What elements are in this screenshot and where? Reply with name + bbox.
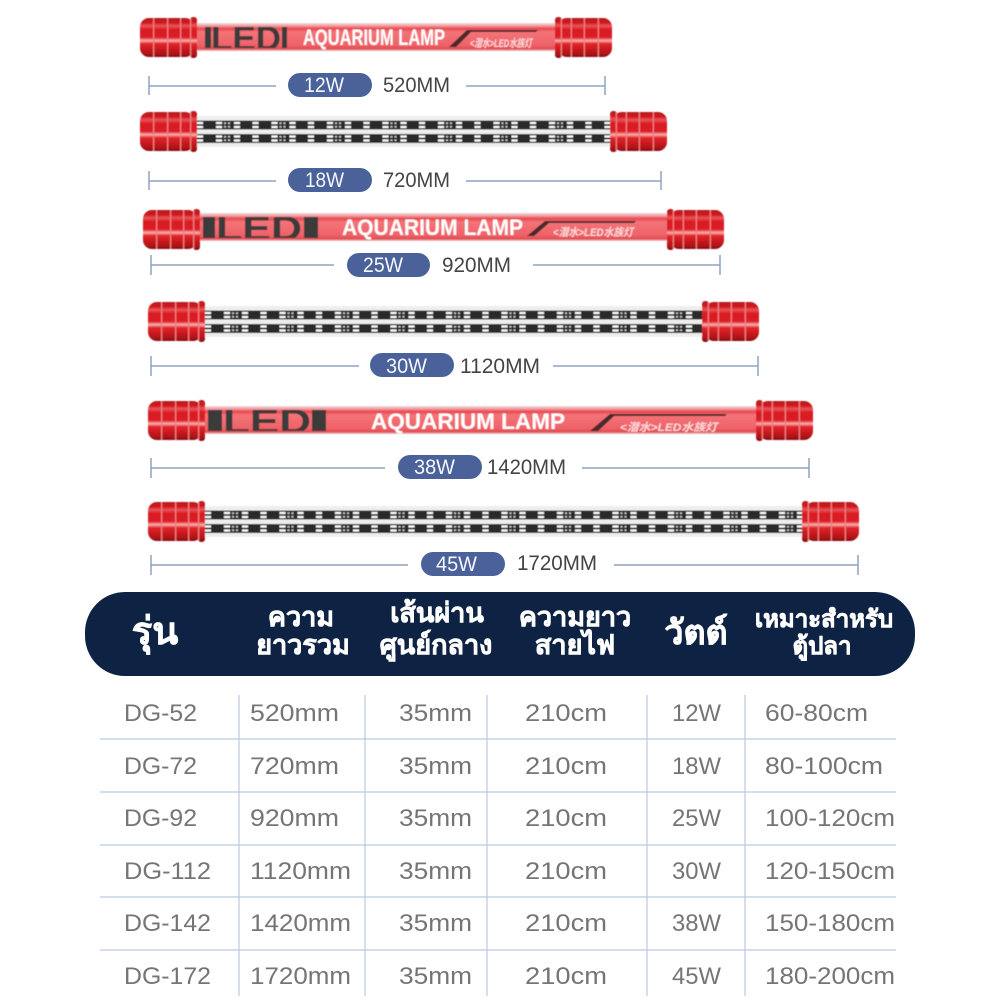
row DG-52: 210cm [525,700,607,727]
row DG-172: 35mm [399,963,472,990]
row DG-172: 210cm [525,963,607,990]
header: model: รุ่น [132,611,178,655]
slash mark [527,221,636,236]
header: center diameter: ศูนย์กลาง [380,629,492,662]
row DG-92 [124,805,895,832]
LED lettering: LED [216,210,302,248]
row DG-142: DG-142 [124,910,211,937]
row DG-72 [124,753,883,780]
row DG-112: 210cm [525,858,607,885]
dimension: 25W 920MM: 25W [363,254,403,277]
row DG-172: DG-172 [124,963,211,990]
row DG-52: DG-52 [124,700,197,727]
row DG-172: 45W [672,963,721,990]
row DG-92: 100-120cm [765,805,895,832]
row DG-72: 80-100cm [765,753,883,780]
LED lettering [202,216,319,239]
LED lettering: LED [223,403,311,441]
small lamp text: <潜水>LED水族灯 [553,226,635,239]
header: total length: ยาวรวม [256,630,350,660]
header: suitable tank: ตู้ปลา [792,633,852,661]
row DG-92: DG-92 [124,805,197,832]
dimension: 30W 1120MM: 30W [386,355,427,378]
dimension: 38W 1420MM [151,455,809,479]
slash mark [449,30,538,47]
lamp label: AQUARIUM LAMP [342,215,523,240]
row DG-142: 35mm [399,910,472,937]
row DG-72: 720mm [250,753,339,780]
row DG-92: 25W [672,805,721,832]
table header bar [85,592,915,676]
dimension: 18W 720MM [149,168,661,192]
row DG-92: 210cm [525,805,607,832]
row DG-112: 35mm [399,858,472,885]
lamp: 38W red tube [148,400,813,441]
dimension: 45W 1720MM: 1720MM [517,552,597,575]
row DG-112: 120-150cm [765,858,895,885]
row DG-72: 35mm [399,753,472,780]
LED lettering [207,410,327,432]
dimension: 18W 720MM: 18W [305,169,344,192]
header: watt: วัตต์ [664,613,728,652]
header: suitable tank: เหมาะสำหรับ [755,606,893,633]
row DG-142 [124,910,895,937]
row DG-142: 150-180cm [765,910,895,937]
row DG-112 [124,858,895,885]
LED lettering: LED [211,20,281,58]
header: center diameter: เส้นผ่าน [390,598,484,628]
row DG-92: 35mm [399,805,472,832]
row DG-112: DG-112 [124,858,211,885]
slash mark [590,414,727,431]
dimension: 38W 1420MM: 38W [414,456,455,479]
row DG-172 [124,963,895,990]
row DG-72: DG-72 [124,753,197,780]
header: cable length: ความยาว [519,602,631,632]
lamp: 30W LED strip [148,301,759,342]
small lamp text: <潜水>LED水族灯 [470,37,533,50]
row DG-52: 12W [672,700,721,727]
header: cable length: สายไฟ [535,629,615,660]
dimension: 38W 1420MM: 1420MM [487,456,566,479]
row DG-172: 1720mm [250,963,351,990]
row DG-52: 520mm [250,700,339,727]
row DG-142: 38W [672,910,721,937]
LED lettering [204,26,288,49]
lamp: 18W LED strip [140,111,667,152]
header: total length: ความ [268,602,334,632]
dimension: 30W 1120MM [151,353,758,378]
lamp label: AQUARIUM LAMP [371,409,565,434]
lamp label: AQUARIUM LAMP [303,25,445,50]
dimension: 30W 1120MM: 1120MM [460,355,540,378]
dimension: 45W 1720MM [151,552,858,576]
dimension: 12W 520MM: 520MM [383,74,450,97]
dimension: 45W 1720MM: 45W [436,553,477,576]
row DG-72: 210cm [525,753,607,780]
lamp: 45W LED strip [148,501,859,542]
small lamp text: <潜水>LED水族灯 [620,421,719,434]
row DG-72: 18W [672,753,721,780]
lamp: 25W red tube [143,209,724,250]
dimension: 25W 920MM [151,253,720,277]
dimension: 12W 520MM: 12W [304,74,344,97]
row DG-112: 1120mm [250,858,351,885]
row DG-142: 1420mm [250,910,351,937]
dimension: 12W 520MM [149,73,605,97]
row DG-172: 180-200cm [765,963,895,990]
dimension: 18W 720MM: 720MM [383,169,450,192]
row DG-52: 35mm [399,700,472,727]
lamp: 12W red tube [140,17,612,58]
row DG-52: 60-80cm [765,700,868,727]
dimension: 25W 920MM: 920MM [442,254,511,277]
table grid and rows [100,695,896,996]
row DG-112: 30W [672,858,721,885]
row DG-142: 210cm [525,910,607,937]
row DG-92: 920mm [250,805,339,832]
row DG-52 [124,700,868,727]
